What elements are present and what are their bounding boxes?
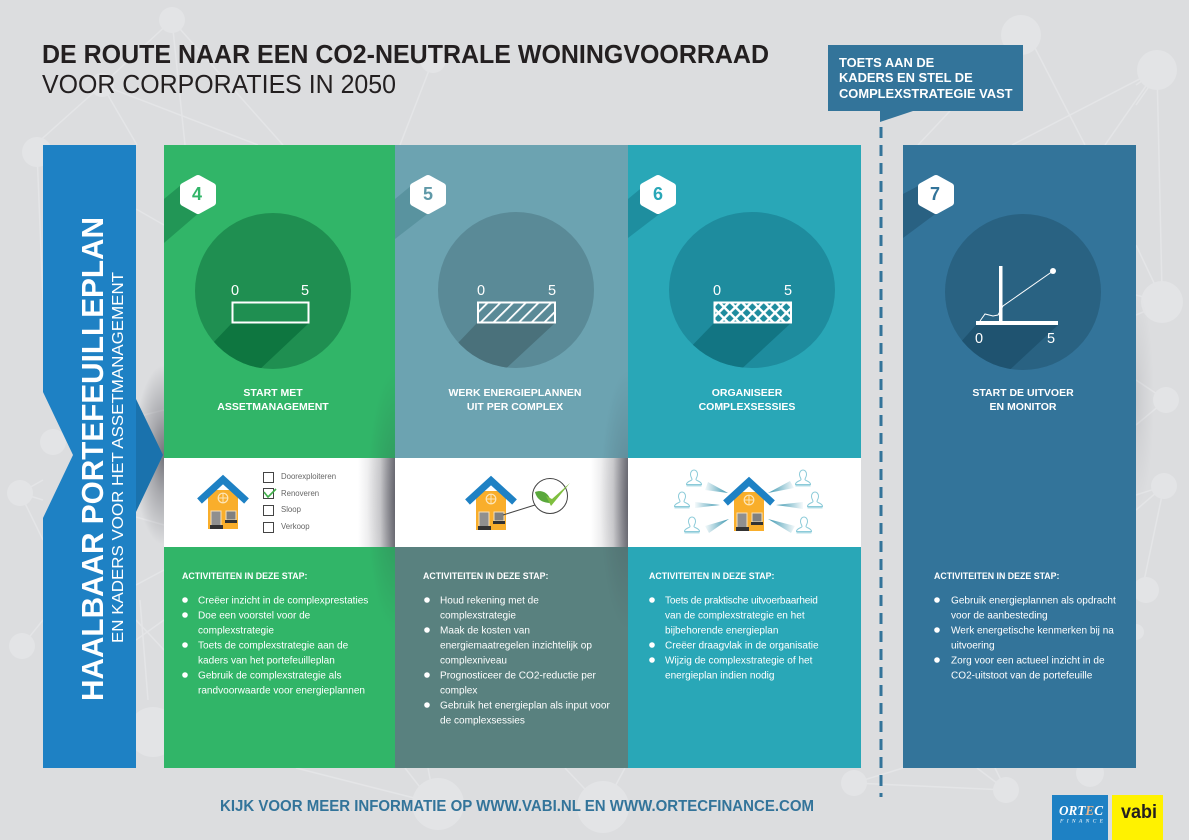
- activities step 7: Werk energetische kenmerken bij na: [951, 626, 1114, 636]
- activities step 7: Gebruik energieplannen als opdracht: [951, 596, 1116, 606]
- panel: step 4: [164, 145, 395, 768]
- illustration: house with checklist: Verkoop: [281, 522, 310, 531]
- activities step 4: ACTIVITEITEN IN DEZE STAP:: [182, 571, 308, 581]
- logo: Ortec Finance: FINANCE: [1059, 818, 1104, 824]
- activities step 4: randvoorwaarde voor energieplannen: [198, 686, 365, 696]
- panel: left banner: [43, 145, 163, 768]
- activities step 5: Houd rekening met de: [440, 596, 539, 606]
- activities step 6: ACTIVITEITEN IN DEZE STAP:: [649, 571, 775, 581]
- step 4 title: START MET: [243, 387, 303, 399]
- activities step 6: Wijzig de complexstrategie of het: [665, 656, 813, 666]
- gauge: hatched bar: 0: [477, 283, 485, 299]
- footer link text: KIJK VOOR MEER INFORMATIE OP WWW.VABI.NL EN WWW.ORTECFINANCE.COM: [220, 798, 814, 815]
- activities step 5: energiemaatregelen inzichtelijk op: [440, 640, 592, 652]
- activities step 5: Prognosticeer de CO2-reductie per: [440, 670, 596, 682]
- activities step 7: [934, 571, 1116, 682]
- step 7 title: START DE UITVOER: [972, 387, 1074, 399]
- activities step 7: ACTIVITEITEN IN DEZE STAP:: [934, 571, 1060, 581]
- activities step 4: Toets de complexstrategie aan de: [198, 640, 349, 652]
- step 5 title: WERK ENERGIEPLANNEN: [448, 387, 582, 399]
- activities step 7: voor de aanbesteding: [951, 610, 1048, 622]
- step 6 title: ORGANISEER: [712, 387, 783, 399]
- illustration: house with checklist: [200, 472, 336, 532]
- gauge: crosshatched bar: [669, 212, 835, 368]
- illustration: house with stakeholders: [674, 470, 822, 533]
- callout: TOETS AAN DE: [839, 55, 935, 70]
- activities step 7: uitvoering: [951, 640, 995, 652]
- activities step 7: CO2-uitstoot van de portefeuille: [951, 670, 1093, 682]
- activities step 6: van de complexstrategie en het: [665, 610, 805, 622]
- step 5 title: UIT PER COMPLEX: [467, 401, 563, 413]
- activities step 5: Gebruik het energieplan als input voor: [440, 700, 610, 712]
- activities step 4: Gebruik de complexstrategie als: [198, 670, 342, 682]
- title: VOOR CORPORATIES IN 2050: [42, 71, 396, 99]
- icon: number 5: 5: [423, 184, 433, 204]
- activities step 4: kaders van het portefeuilleplan: [198, 656, 335, 666]
- activities step 6: energieplan indien nodig: [665, 670, 774, 682]
- icon: number 7: 7: [930, 184, 940, 204]
- activities step 5: de complexsessies: [440, 716, 525, 726]
- activities step 5: ACTIVITEITEN IN DEZE STAP:: [423, 571, 549, 581]
- illustration: house with leaf and check: [468, 477, 570, 530]
- chart: monitoring line: [945, 214, 1101, 370]
- activities step 4: complexstrategie: [198, 626, 274, 636]
- step 6 title: COMPLEXSESSIES: [699, 401, 795, 413]
- panel: step 6: [628, 145, 861, 768]
- icon: number 7: [922, 178, 950, 210]
- activities step 5: [423, 571, 610, 726]
- panel: step 5: [395, 145, 628, 768]
- logo: Vabi: [1112, 795, 1163, 840]
- title: [42, 41, 769, 99]
- gauge: score 0 to 5: 0: [231, 283, 239, 299]
- logo: Ortec Finance: ORTEC: [1059, 804, 1104, 819]
- icon: number 4: 4: [192, 184, 202, 204]
- illustration: house with checklist: Sloop: [281, 505, 302, 514]
- activities step 5: complex: [440, 686, 477, 696]
- icon: number 6: 6: [653, 184, 663, 204]
- activities step 6: Toets de praktische uitvoerbaarheid: [665, 596, 818, 606]
- activities step 5: complexniveau: [440, 656, 507, 666]
- activities step 4: Creëer inzicht in de complexprestaties: [198, 596, 368, 606]
- chart: monitoring line: 0: [975, 331, 983, 347]
- gauge: hatched bar: [438, 212, 594, 368]
- activities step 4: Doe een voorstel voor de: [198, 610, 311, 622]
- activities step 7: Zorg voor een actueel inzicht in de: [951, 656, 1105, 666]
- icon: number 4: [184, 178, 212, 210]
- step 4 title: ASSETMANAGEMENT: [217, 401, 329, 413]
- activities step 4: [182, 571, 368, 696]
- activities step 5: complexstrategie: [440, 610, 516, 622]
- activities step 6: Creëer draagvlak in de organisatie: [665, 640, 819, 652]
- title: DE ROUTE NAAR EEN CO2-NEUTRALE WONINGVOORRAAD: [42, 41, 769, 69]
- illustration: house with checklist: Doorexploiteren: [281, 472, 336, 481]
- step 7 title: EN MONITOR: [990, 401, 1057, 413]
- panel: step 7: [903, 145, 1136, 768]
- icon: number 5: [414, 178, 442, 210]
- chart: monitoring line: 5: [1047, 331, 1055, 347]
- callout: [828, 45, 1023, 122]
- illustration: house with checklist: Renoveren: [281, 489, 319, 498]
- gauge: crosshatched bar: 5: [784, 283, 792, 299]
- gauge: score 0 to 5: [195, 213, 351, 369]
- gauge: crosshatched bar: 0: [713, 283, 721, 299]
- gauge: score 0 to 5: 5: [301, 283, 309, 299]
- gauge: hatched bar: 5: [548, 283, 556, 299]
- banner subheading: EN KADERS VOOR HET ASSETMANAGEMENT: [110, 272, 127, 643]
- icon: number 6: [644, 178, 672, 210]
- activities step 6: [649, 571, 819, 682]
- dashed milestone line: [880, 127, 882, 797]
- banner heading: HAALBAAR PORTEFEUILLEPLAN: [75, 217, 110, 701]
- callout: KADERS EN STEL DE: [839, 70, 973, 85]
- callout: COMPLEXSTRATEGIE VAST: [839, 86, 1013, 101]
- activities step 5: Maak de kosten van: [440, 626, 530, 636]
- activities step 6: bijbehorende energieplan: [665, 626, 778, 636]
- logo: Ortec Finance: [1052, 795, 1108, 840]
- logo: Vabi: vabi: [1121, 802, 1157, 823]
